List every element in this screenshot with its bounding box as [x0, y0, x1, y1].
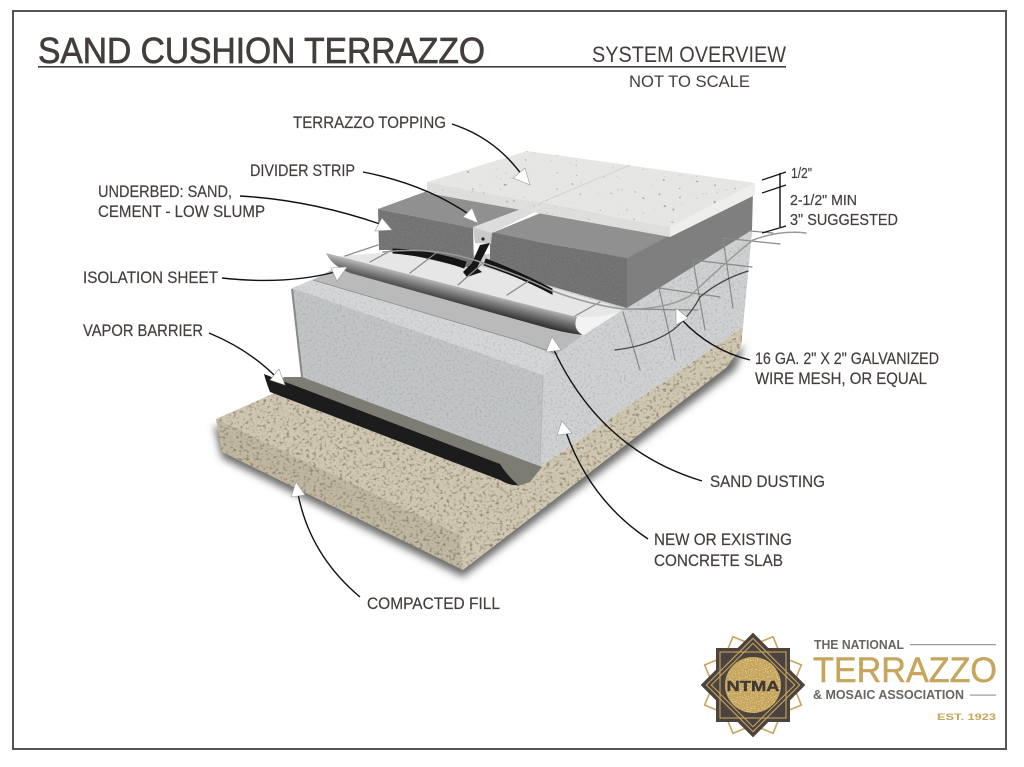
concrete front shading — [292, 288, 543, 467]
layer: concrete slab — [292, 232, 752, 467]
vapor barrier curl — [264, 374, 518, 485]
label: new or existing concrete slab: NEW OR EXISTING — [654, 530, 792, 549]
black groove under underbed — [393, 249, 552, 294]
dimension marks — [762, 172, 786, 233]
logo: mosaic association: & MOSAIC ASSOCIATION — [813, 688, 964, 702]
label: terrazzo topping: TERRAZZO TOPPING — [293, 113, 446, 132]
label: compacted fill: COMPACTED FILL — [367, 594, 500, 613]
label: underbed: CEMENT - LOW SLUMP — [98, 202, 265, 221]
subtitle: system overview: SYSTEM OVERVIEW — [592, 42, 786, 67]
isolation sheet end — [576, 309, 624, 335]
arrow: compacted fill — [291, 482, 360, 597]
logo: the national: THE NATIONAL — [814, 638, 904, 652]
logo rule bottom — [970, 694, 996, 696]
layer: terrazzo topping — [427, 151, 755, 237]
label: vapor barrier: VAPOR BARRIER — [83, 321, 203, 340]
label: wire mesh: WIRE MESH, OR EQUAL — [755, 369, 927, 388]
logo emblem: NTMA — [726, 678, 780, 695]
dimension: 2-1/2 inch minimum: 2-1/2" MIN — [790, 192, 857, 209]
sand dusting line — [313, 280, 558, 354]
wire mesh — [345, 231, 806, 370]
concrete left edge shadow — [292, 289, 302, 377]
system cross-section illustration — [214, 151, 806, 577]
arrow: isolation sheet — [222, 267, 347, 281]
label: new or existing concrete slab: CONCRETE SLAB — [654, 551, 783, 570]
arrow: underbed — [240, 196, 392, 231]
title: Sand Cushion Terrazzo: SAND CUSHION TERRAZZO — [38, 30, 485, 71]
arrow: terrazzo topping — [452, 124, 530, 185]
arrow: divider strip — [363, 172, 478, 223]
divider strip — [463, 203, 539, 277]
layer: vapor barrier strip — [276, 377, 542, 486]
label: wire mesh: 16 GA. 2" X 2" GALVANIZED — [755, 349, 939, 368]
label: sand dusting: SAND DUSTING — [710, 472, 825, 491]
arrow: vapor barrier — [209, 333, 285, 385]
logo: established: EST. 1923 — [937, 712, 996, 722]
compacted fill front face shading — [216, 419, 463, 570]
sand dusting band — [313, 268, 582, 355]
logo: NTMA — [701, 633, 997, 737]
front corner edge — [540, 375, 543, 467]
label: underbed — [98, 182, 265, 221]
logo rule top — [910, 644, 996, 645]
title underline — [38, 66, 786, 68]
label: underbed: UNDERBED: SAND, — [98, 182, 232, 201]
ground shadow — [214, 345, 745, 577]
concrete top shading — [292, 268, 570, 375]
layer: underbed right block — [490, 192, 753, 308]
layer: isolation sheet — [340, 252, 623, 334]
label: divider strip: DIVIDER STRIP — [250, 161, 355, 180]
label: new or existing concrete slab — [654, 530, 792, 570]
layer: compacted fill — [216, 327, 743, 570]
logo: terrazzo: TERRAZZO — [813, 651, 997, 690]
dimension: 1/2 inch: 1/2" — [791, 165, 812, 182]
arrow: concrete slab — [557, 421, 648, 539]
arrow: sand dusting — [546, 337, 702, 481]
curled edge — [326, 253, 582, 335]
label: wire mesh — [755, 349, 939, 388]
logo emblem — [701, 633, 805, 737]
note: not to scale: NOT TO SCALE — [629, 72, 750, 91]
dimension: 3 inch suggested: 3" SUGGESTED — [790, 212, 898, 229]
arrow: wire mesh — [676, 308, 750, 360]
layer: underbed left block — [378, 190, 560, 268]
label: isolation sheet: ISOLATION SHEET — [83, 268, 218, 287]
